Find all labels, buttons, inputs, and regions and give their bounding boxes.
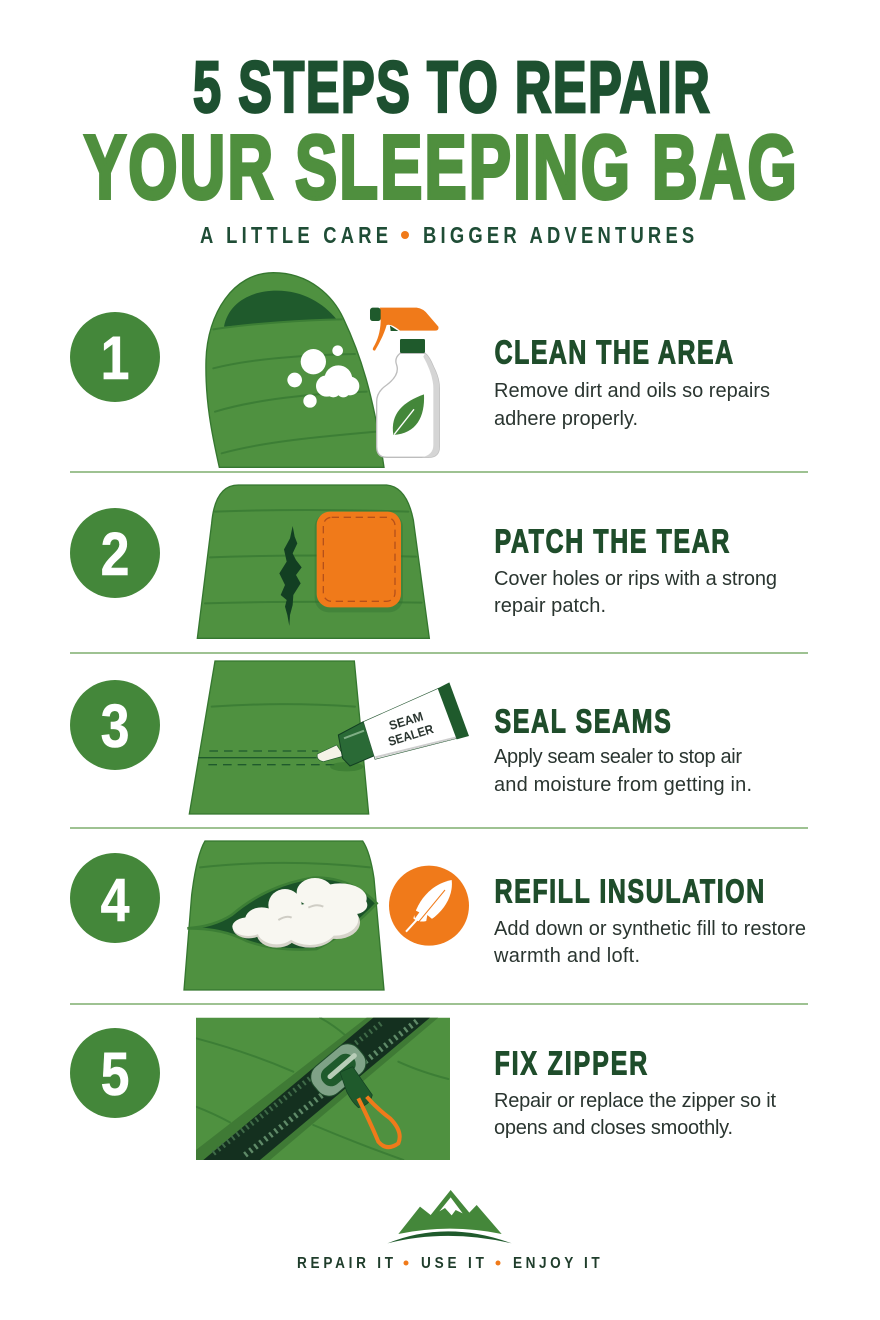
text: fix zipper: Repair or replace the zipper so it	[494, 1090, 776, 1112]
text: clean the area: Remove dirt and oils so repairs	[494, 380, 770, 402]
text: patch the tear: Cover holes or rips with a strong	[494, 568, 777, 590]
step 5 number badge	[70, 1028, 160, 1118]
footer tagline: ENJOY IT	[513, 1255, 600, 1272]
step 3	[70, 661, 469, 814]
zipper pull loop	[358, 1097, 400, 1147]
text: seal seams: Apply seam sealer to stop air	[494, 746, 742, 768]
step 1	[70, 273, 439, 467]
step 3 icon: seam sealer tube: SEALER	[386, 722, 435, 749]
step 1 number badge: 1	[101, 324, 129, 392]
step 2 illustration: bag with tear	[197, 485, 429, 638]
heading: fix zipper: FIX ZIPPER	[494, 1045, 647, 1082]
title: YOUR SLEEPING BAG	[84, 118, 797, 218]
step 3 icon: seam sealer tube: SEAM	[387, 709, 425, 733]
text: seal seams: and moisture from getting in.	[494, 774, 752, 796]
heading: refill insulation: REFILL INSULATION	[494, 873, 764, 910]
heading: clean the area: CLEAN THE AREA	[494, 334, 733, 371]
text: refill insulation	[493, 918, 806, 967]
step 1 icon: spray bottle	[370, 308, 439, 457]
subtitle	[200, 223, 694, 249]
text: refill insulation: warmth and loft.	[493, 945, 640, 967]
footer tagline	[297, 1255, 600, 1272]
step 5 illustration: zipper	[196, 1018, 450, 1160]
text: refill insulation: Add down or synthetic fill to restore	[494, 918, 806, 940]
text: patch the tear	[494, 568, 777, 617]
step 4 number badge: 4	[101, 866, 130, 934]
step 3 number badge: 3	[101, 692, 129, 760]
step 2	[70, 485, 429, 638]
footer tagline: USE IT	[421, 1255, 484, 1272]
heading: patch the tear: PATCH THE TEAR	[494, 523, 729, 560]
subtitle: A LITTLE CARE	[200, 223, 388, 249]
step 2 number badge	[70, 508, 160, 598]
text: fix zipper	[494, 1090, 776, 1139]
text: seal seams	[494, 746, 752, 796]
step 5 number badge: 5	[101, 1040, 129, 1108]
divider lines	[70, 472, 808, 1004]
text: patch the tear: repair patch.	[494, 595, 606, 617]
heading: seal seams: SEAL SEAMS	[494, 703, 671, 740]
step 4 number badge	[70, 853, 160, 943]
icon: mountain logo	[387, 1190, 512, 1243]
title	[84, 48, 797, 218]
step 5	[70, 1018, 450, 1160]
step 3 icon: seam sealer tube	[317, 682, 469, 766]
step 2 patch	[315, 512, 403, 612]
text: clean the area	[494, 380, 770, 430]
step 1 illustration: sleeping bag with foam	[206, 273, 384, 467]
step 3 illustration: bag with seam	[189, 661, 369, 814]
text: fix zipper: opens and closes smoothly.	[494, 1117, 733, 1139]
footer tagline: REPAIR IT	[297, 1255, 393, 1272]
step 3 number badge	[70, 680, 160, 770]
title: 5 STEPS TO REPAIR	[193, 48, 710, 128]
step 2 number badge: 2	[101, 520, 129, 588]
subtitle: BIGGER ADVENTURES	[423, 223, 694, 249]
step 4 illustration: bag with insulation	[184, 841, 384, 990]
step 4 icon: feather	[389, 866, 469, 946]
step 1 number badge	[70, 312, 160, 402]
step 4	[70, 841, 469, 990]
text: clean the area: adhere properly.	[494, 408, 638, 430]
zipper slider	[305, 1038, 372, 1108]
